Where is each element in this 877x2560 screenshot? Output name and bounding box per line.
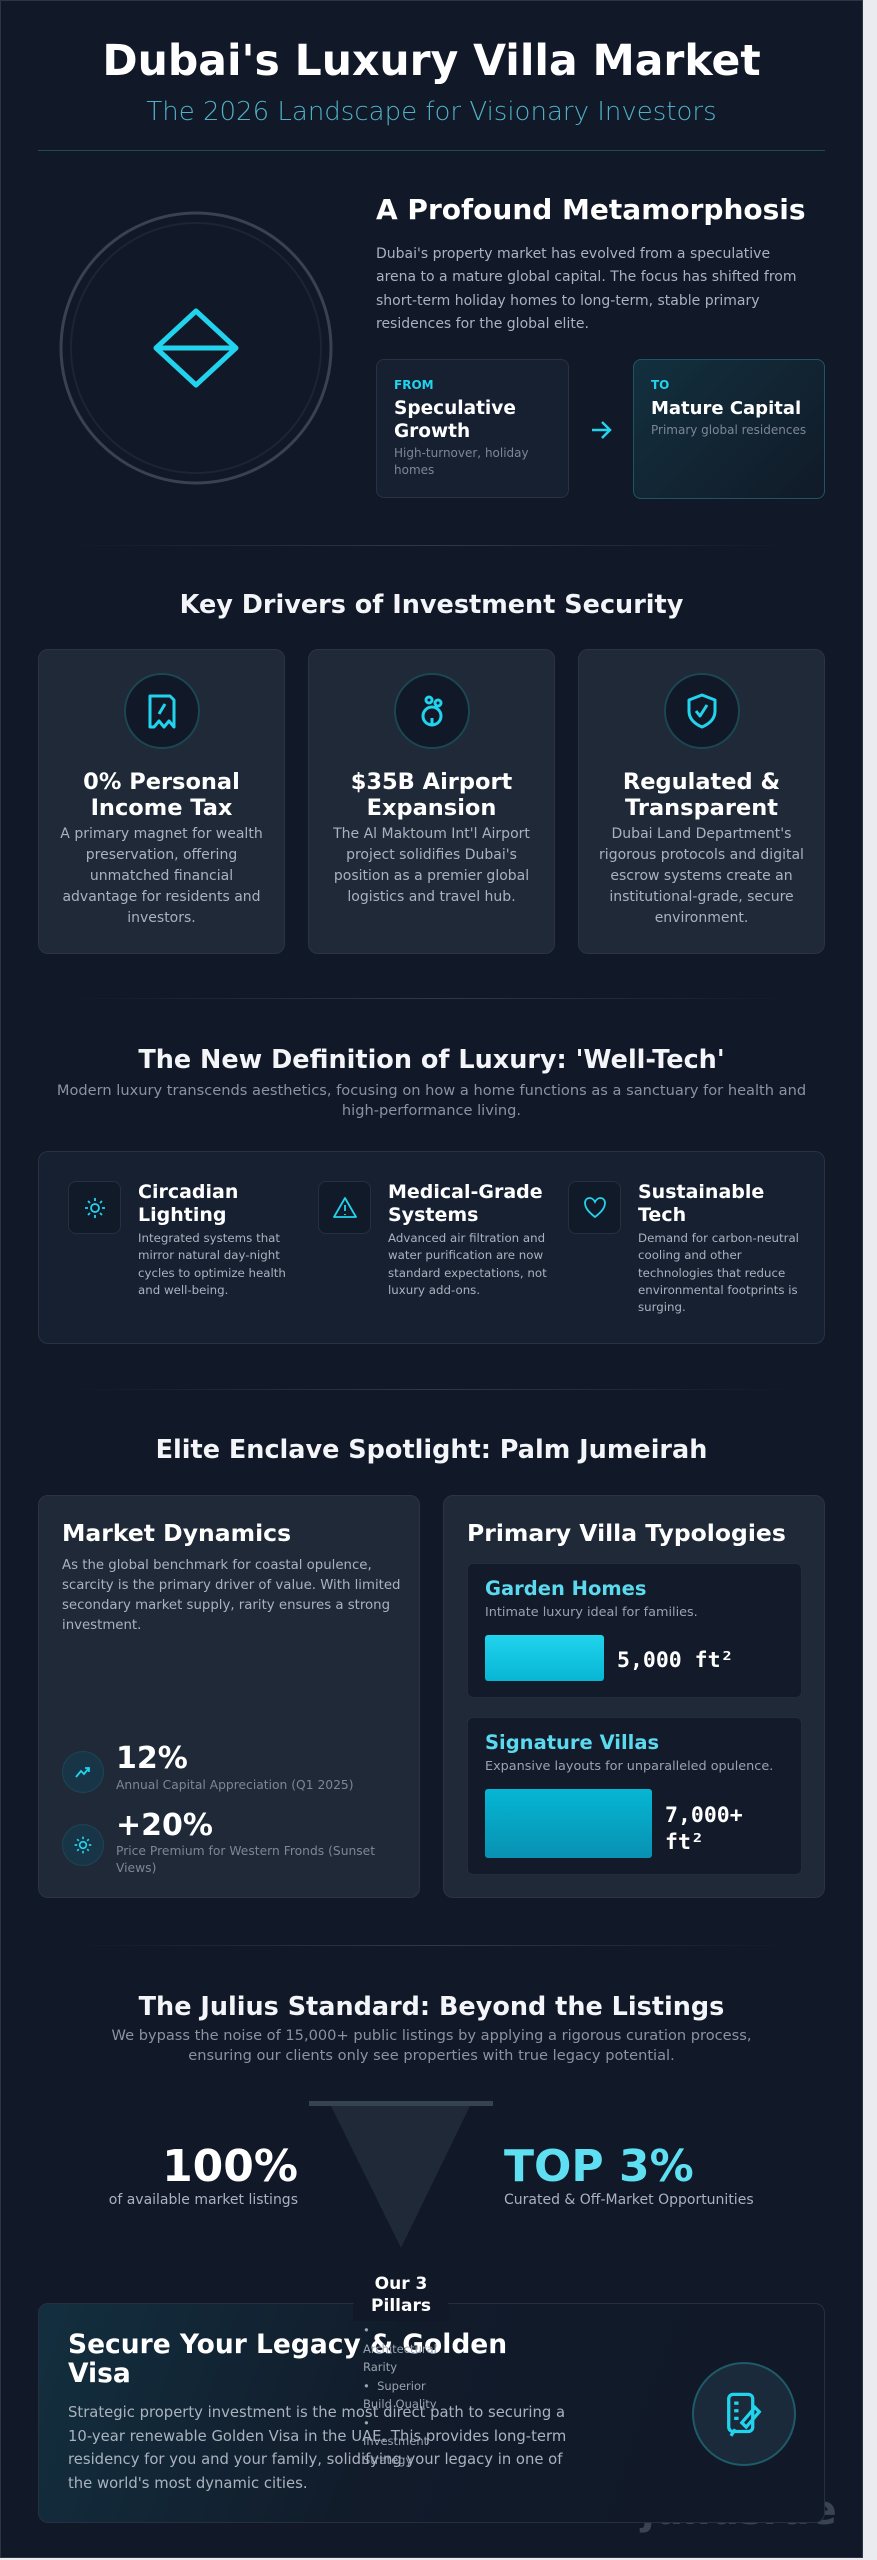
panel: regulated xyxy=(578,649,825,954)
stat: +20%: Price Premium for Western Fronds (Sunset Views) xyxy=(116,1844,375,1875)
icon: circle with diamond xyxy=(60,212,332,484)
watermark: juliusrae xyxy=(641,2488,837,2534)
panel: golden visa xyxy=(38,2303,825,2523)
stat: 100%: 100% xyxy=(162,2141,298,2192)
heading: well-tech: The New Definition of Luxury: 'Well-Tech' xyxy=(138,1045,725,1075)
panel: airport: The Al Maktoum Int'l Airport project solidifies Dubai's position as a premier global logistics and travel hub. xyxy=(333,826,530,905)
label: our 3 pillars: Build Quality xyxy=(363,2397,437,2411)
card: from: High-turnover, holiday homes xyxy=(394,446,529,477)
label: our 3 pillars: Pillars xyxy=(371,2296,431,2316)
panel: tax: A primary magnet for wealth preservation, offering unmatched financial advantage for residents and investors. xyxy=(60,826,263,926)
card: signature villas: Expansive layouts for unparalleled opulence. xyxy=(485,1759,773,1774)
label: our 3 pillars: Architectural xyxy=(363,2342,437,2356)
heading: key drivers: Key Drivers of Investment Security xyxy=(180,590,683,620)
card: signature villas: 7,000+ xyxy=(665,1803,743,1828)
card: signature villas: ft² xyxy=(665,1830,704,1855)
panel: regulated: Dubai Land Department's rigorous protocols and digital escrow systems create an institutional-grade, secure environment. xyxy=(599,826,804,926)
panel: market dynamics: As the global benchmark for coastal opulence, scarcity is the primary driver of value. With limited secondary market supply, rarity ensures a strong investment. xyxy=(62,1558,400,1633)
card: to xyxy=(633,359,825,499)
stat: 12% xyxy=(62,1741,354,1793)
card: signature villas xyxy=(467,1717,802,1875)
subtitle: The 2026 Landscape for Visionary Investors xyxy=(146,97,717,127)
stat: 12%: Annual Capital Appreciation (Q1 2025) xyxy=(116,1778,354,1792)
bar: 7000 xyxy=(485,1789,652,1858)
panel: market dynamics xyxy=(38,1495,420,1898)
bar: 5000 xyxy=(485,1635,604,1681)
panel: tax: 0% Personal xyxy=(83,769,240,795)
panel: tax: Income Tax xyxy=(91,795,232,821)
panel: regulated: Transparent xyxy=(625,795,778,821)
feature: sustainable: Demand for carbon-neutral cooling and other technologies that reduce environmental footprints is surging. xyxy=(638,1231,799,1314)
feature: sustainable xyxy=(568,1181,799,1314)
text: metamorphosis: Dubai's property market has evolved from a speculative arena to a mature global capital. The focus has shifted from short-term holiday homes to long-term, stable primary residences for the global elite. xyxy=(376,246,796,332)
icon: receipt xyxy=(124,673,200,749)
panel: airport: Expansion xyxy=(367,795,496,821)
feature: circadian: Lighting xyxy=(138,1204,226,1226)
card: to: TO xyxy=(651,378,669,392)
card: signature villas: Signature Villas xyxy=(485,1731,659,1754)
feature: medical xyxy=(318,1181,547,1297)
label: our 3 pillars: • xyxy=(363,2323,370,2337)
stat: 100%: of available market listings xyxy=(109,2192,298,2208)
label: our 3 pillars: • Superior xyxy=(363,2378,426,2392)
panel: tax xyxy=(38,649,285,954)
stat: top 3%: Curated & Off-Market Opportunities xyxy=(504,2192,754,2208)
panel: golden visa: Strategic property investment is the most direct path to securing a 10-year renewable Golden Visa in the UAE. This provides long-term residency for you and your family, solidifying your legacy in one of the world's most dynamic cities. xyxy=(68,2404,566,2492)
card: to: Mature Capital xyxy=(651,398,801,419)
label: our 3 pillars: Investment xyxy=(363,2434,428,2448)
panel: golden visa: Secure Your Legacy & Golden Visa xyxy=(68,2329,507,2389)
panel: well-tech features xyxy=(38,1151,825,1344)
panel: villa typologies: Primary Villa Typologies xyxy=(467,1519,786,1547)
heading: palm jumeirah: Elite Enclave Spotlight: Palm Jumeirah xyxy=(156,1435,707,1465)
panel: regulated: Regulated & xyxy=(623,769,780,795)
feature: medical: Advanced air filtration and water purification are now standard expectations, not luxury add-ons. xyxy=(388,1231,547,1297)
label: our 3 pillars: Our 3 xyxy=(375,2274,427,2294)
card: garden homes: Intimate luxury ideal for families. xyxy=(485,1605,698,1620)
stat: +20%: +20% xyxy=(116,1808,213,1843)
label: our 3 pillars: Strategy xyxy=(363,2452,412,2466)
label: our 3 pillars: • xyxy=(363,2416,370,2430)
card: from: Speculative Growth xyxy=(394,398,516,442)
feature: sustainable: Sustainable xyxy=(638,1181,764,1203)
stat: top 3%: TOP 3% xyxy=(504,2141,694,2192)
feature: circadian: Integrated systems that mirror natural day-night cycles to optimize health and well-being. xyxy=(138,1231,286,1297)
card: garden homes: 5,000 ft² xyxy=(617,1648,734,1673)
card: garden homes: Garden Homes xyxy=(485,1577,647,1600)
heading: julius standard: The Julius Standard: Beyond the Listings xyxy=(139,1992,724,2022)
card: from xyxy=(376,359,569,498)
stat: 100% xyxy=(109,2141,298,2208)
label: our 3 pillars: Rarity xyxy=(363,2360,397,2374)
panel: market dynamics: Market Dynamics xyxy=(62,1519,291,1547)
label: our 3 pillars xyxy=(354,2274,448,2466)
panel: villa typologies xyxy=(443,1495,825,1898)
feature: circadian xyxy=(68,1181,286,1297)
feature: medical: Systems xyxy=(388,1204,478,1226)
subtitle: julius: We bypass the noise of 15,000+ public listings by applying a rigorous curation process, ensuring our clients only see properties with true legacy potential. xyxy=(112,2027,751,2064)
panel: airport: $35B Airport xyxy=(351,769,512,795)
icon: document xyxy=(692,2362,796,2466)
funnel xyxy=(309,2101,493,2248)
arrow xyxy=(592,421,612,439)
icon: airport xyxy=(394,673,470,749)
card: from: FROM xyxy=(394,378,434,392)
feature: circadian: Circadian xyxy=(138,1181,238,1203)
title: Dubai's Luxury Villa Market xyxy=(102,37,761,86)
feature: sustainable: Tech xyxy=(638,1204,686,1226)
feature: medical: Medical-Grade xyxy=(388,1181,543,1203)
stat: top 3% xyxy=(504,2141,754,2208)
subtitle: well-tech: Modern luxury transcends aesthetics, focusing on how a home functions as a sanctuary for health and high-performance living. xyxy=(57,1082,806,1119)
card: to: Primary global residences xyxy=(651,423,806,437)
stat: 12%: 12% xyxy=(116,1741,188,1776)
stat: +20% xyxy=(62,1808,375,1875)
heading: metamorphosis: A Profound Metamorphosis xyxy=(376,193,806,226)
panel: airport xyxy=(308,649,555,954)
card: garden homes xyxy=(467,1563,802,1698)
icon: shield xyxy=(664,673,740,749)
